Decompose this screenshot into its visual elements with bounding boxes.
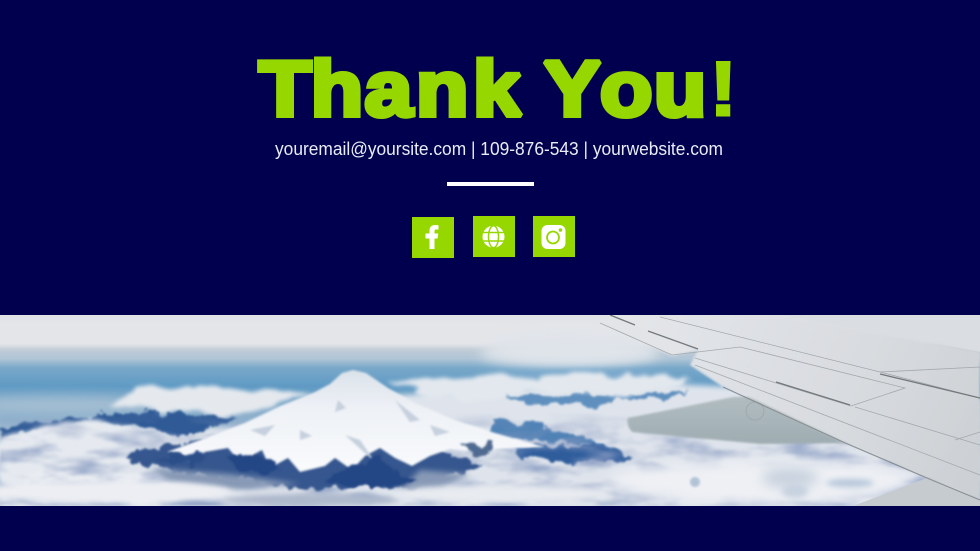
inner flap <box>655 346 696 357</box>
engine fairing <box>628 396 860 444</box>
divider bar <box>447 182 534 186</box>
mountain base rocks <box>125 430 480 488</box>
icon: globe <box>473 216 515 257</box>
distant dark ridges <box>0 413 240 438</box>
bottom clouds <box>0 460 910 506</box>
snow cap <box>167 370 545 472</box>
blue gaps between clouds on the right <box>522 366 628 378</box>
contact details: youremail@yoursite.com | 109-876-543 | yourwebsite.com <box>275 139 723 159</box>
lower rock speckle <box>150 468 470 490</box>
photo: mountain and airplane wing <box>0 315 980 510</box>
title: Thank You! <box>259 46 738 133</box>
upper-left cloud bank <box>108 387 312 415</box>
wing trailing edge shadow <box>723 387 980 500</box>
cloud deck <box>0 369 980 510</box>
cloud bank right of the peak <box>385 373 690 402</box>
sky behind wing tip <box>952 346 980 352</box>
dark rock streaks <box>325 456 418 487</box>
snow texture shadows <box>250 400 450 462</box>
panel lines <box>600 317 980 475</box>
wing surface <box>689 337 980 499</box>
cloud texture <box>0 415 974 506</box>
lower wing section <box>853 478 980 506</box>
mountain <box>125 370 545 490</box>
sky and horizon <box>0 315 980 506</box>
airplane wing <box>598 315 980 506</box>
left foreground clouds <box>0 420 250 506</box>
icon: facebook <box>412 217 454 258</box>
icon: instagram <box>533 216 575 257</box>
